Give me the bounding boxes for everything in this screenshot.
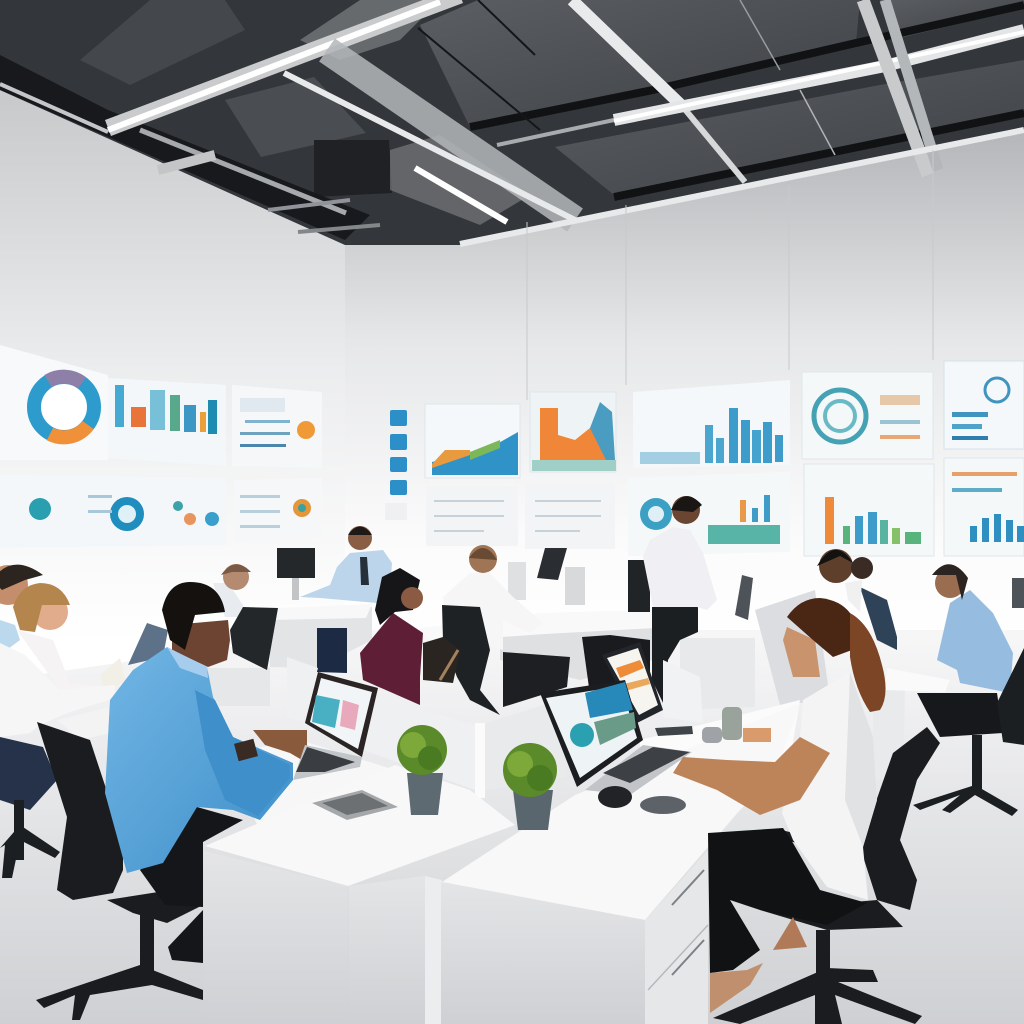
panel: bar chart	[108, 378, 226, 466]
back wall charts	[425, 361, 1024, 556]
blue tiles	[385, 410, 407, 520]
white laptop: foreground left	[293, 672, 378, 780]
partition: center	[363, 697, 567, 798]
panel: orange bar chart	[530, 392, 616, 472]
paper beside laptop	[287, 657, 318, 722]
desktop: front left	[240, 740, 395, 830]
dark block: back cabinet	[317, 628, 347, 673]
desk front right	[441, 882, 645, 1024]
person: standing man	[643, 496, 717, 705]
panel: radial chart	[802, 372, 933, 459]
desk top left	[205, 765, 515, 886]
panel: orange and teal bars	[804, 464, 934, 556]
panel: lower left charts	[0, 475, 226, 548]
black box under desk	[503, 652, 570, 707]
back office: desks	[57, 590, 950, 780]
monitors	[128, 548, 1024, 700]
desk drawers	[645, 850, 708, 1024]
person: woman in maroon	[360, 568, 460, 705]
ceiling light rails and ducts	[0, 0, 1024, 244]
person: man far left torso	[0, 643, 115, 810]
panel: text report	[232, 385, 322, 468]
ceiling	[0, 0, 1024, 245]
back partition: right desk	[640, 700, 800, 810]
wall seams	[527, 150, 933, 400]
panel: lower right report	[234, 478, 322, 542]
mouse and phone on desk	[598, 786, 686, 814]
chair: far left base	[0, 800, 60, 878]
person: man with headset in navy	[817, 549, 897, 650]
desk front faces left	[204, 851, 348, 1024]
chair: foreground right	[713, 727, 940, 1024]
person: man far left	[0, 565, 43, 655]
chair: back left	[230, 607, 278, 670]
person: blonde woman far left	[13, 583, 125, 700]
plant: right pot	[503, 743, 557, 830]
person: woman at back left	[213, 564, 251, 617]
left wall charts	[0, 345, 322, 548]
panel: lower right bars	[944, 458, 1024, 556]
panel: faint chart right	[525, 483, 615, 549]
person: man in white from behind	[443, 545, 543, 650]
panel: dashboard behind standing man	[628, 472, 790, 556]
laptop: second	[602, 642, 663, 723]
panel: donut chart	[0, 345, 108, 460]
monitor: center front	[540, 680, 692, 795]
plant: left pot	[397, 725, 447, 815]
person: man in blue shirt foreground	[36, 582, 307, 1020]
desk surface front	[204, 765, 515, 1024]
floor	[0, 630, 1024, 1024]
chair: foreground left	[36, 722, 203, 1020]
panel: faint chart left	[426, 486, 518, 546]
chair: right back	[913, 648, 1024, 816]
panel: top right chart	[944, 361, 1024, 449]
person: man in blue at right	[917, 564, 1013, 737]
panel: area chart	[425, 404, 520, 478]
chair: center back	[442, 605, 500, 715]
tablet on desk	[312, 790, 398, 820]
person: woman foreground right	[673, 598, 886, 1013]
left wall	[0, 90, 345, 690]
desk accessories	[655, 707, 771, 743]
desk top right	[442, 703, 800, 920]
person: man with tie at back	[300, 526, 392, 603]
panel: white cabinet front	[663, 660, 703, 723]
back wall	[345, 125, 1024, 660]
panel: blue bar chart	[633, 380, 790, 468]
